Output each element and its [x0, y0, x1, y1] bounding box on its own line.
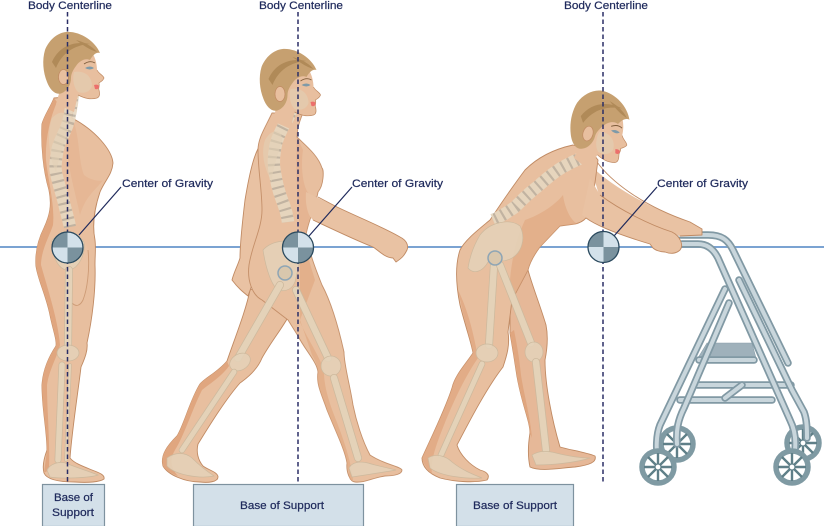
- walker outer handle: [678, 235, 788, 363]
- far arm stooped: [590, 162, 702, 236]
- shading standing: [36, 98, 60, 473]
- center of gravity marker: stooped: [588, 232, 619, 262]
- head: walking: [260, 49, 320, 129]
- pelvis stooped: [468, 222, 523, 272]
- centerline: standing: [66, 12, 68, 484]
- foot bones stooped: [428, 451, 590, 478]
- spine stooped: [493, 155, 590, 220]
- base of support: stooped: Base of Support: [473, 500, 558, 512]
- arm standing: [60, 231, 89, 305]
- front leg shading walking: [300, 240, 353, 480]
- spine standing: [56, 93, 73, 227]
- walker main handle and leg: [682, 244, 795, 450]
- rib cage walking: [263, 131, 282, 182]
- torso shading walking: [296, 137, 316, 235]
- leg bones walking: [182, 285, 358, 458]
- center of gravity leader: walking: [309, 187, 352, 236]
- far leg stooped: [500, 260, 595, 469]
- torso and front leg walking: [249, 113, 402, 482]
- centerline: stooped: [602, 12, 604, 483]
- foot bones walking: [167, 454, 396, 477]
- center of gravity leader: standing: [79, 187, 121, 235]
- label: body centerline standing: Body Centerline: [28, 0, 112, 12]
- rib cage standing: [49, 113, 68, 172]
- center of gravity leader: stooped: [614, 187, 657, 236]
- walker left leg: [657, 289, 725, 462]
- leg bones stooped: [441, 265, 546, 455]
- rear leg shading walking: [162, 361, 229, 476]
- walker inner leg: [677, 303, 729, 444]
- figure: walking: [162, 108, 408, 482]
- walker: [642, 235, 819, 483]
- chest shading standing: [66, 118, 103, 215]
- body silhouette standing: [36, 96, 113, 482]
- label: body centerline stooped: Body Centerline: [564, 0, 648, 12]
- walker seat: [698, 343, 756, 358]
- centerline: walking: [297, 12, 299, 484]
- foot bones standing: [47, 462, 98, 478]
- pelvis standing: [52, 234, 84, 270]
- rear leg walking: [162, 270, 300, 482]
- hip joint walking: [278, 266, 292, 280]
- spine walking: [274, 108, 292, 222]
- base of support: stooped: [456, 484, 574, 526]
- base of support: standing: [42, 484, 104, 526]
- center of gravity marker: walking: [282, 232, 314, 263]
- base of support: walking: Base of Support: [240, 500, 325, 512]
- center of gravity marker: standing: [52, 232, 83, 263]
- near leg shading stooped: [422, 290, 478, 474]
- figure: standing upright: [36, 93, 113, 482]
- right arm walking: [306, 192, 408, 262]
- hip joint stooped: [488, 251, 502, 265]
- walker cross bars: [680, 360, 791, 400]
- far leg shading stooped: [510, 330, 532, 438]
- figure: stooped with walker: [422, 145, 702, 482]
- front wheels: [642, 451, 808, 483]
- rear wheels: [661, 427, 819, 460]
- pelvis walking: [263, 241, 301, 291]
- head: standing: [43, 32, 104, 112]
- base of support: standing: Support: [52, 507, 95, 519]
- torso and near leg stooped: [422, 145, 598, 482]
- leg bones standing: [57, 270, 79, 460]
- label: center of gravity stooped: Center of Gravity: [657, 178, 748, 190]
- walker third tube: [739, 280, 807, 438]
- horizontal center of gravity line: [0, 246, 824, 248]
- back arm walking: [232, 143, 268, 296]
- near arm stooped: [582, 178, 682, 253]
- head: stooped: [559, 85, 639, 178]
- base of support: walking: [194, 484, 364, 526]
- torso shading stooped: [510, 195, 578, 300]
- label: center of gravity standing: Center of Gravity: [122, 178, 213, 190]
- label: body centerline walking: Body Centerline: [259, 0, 343, 12]
- label: center of gravity walking: Center of Gravity: [352, 178, 443, 190]
- base of support: standing: Base of: [54, 492, 94, 504]
